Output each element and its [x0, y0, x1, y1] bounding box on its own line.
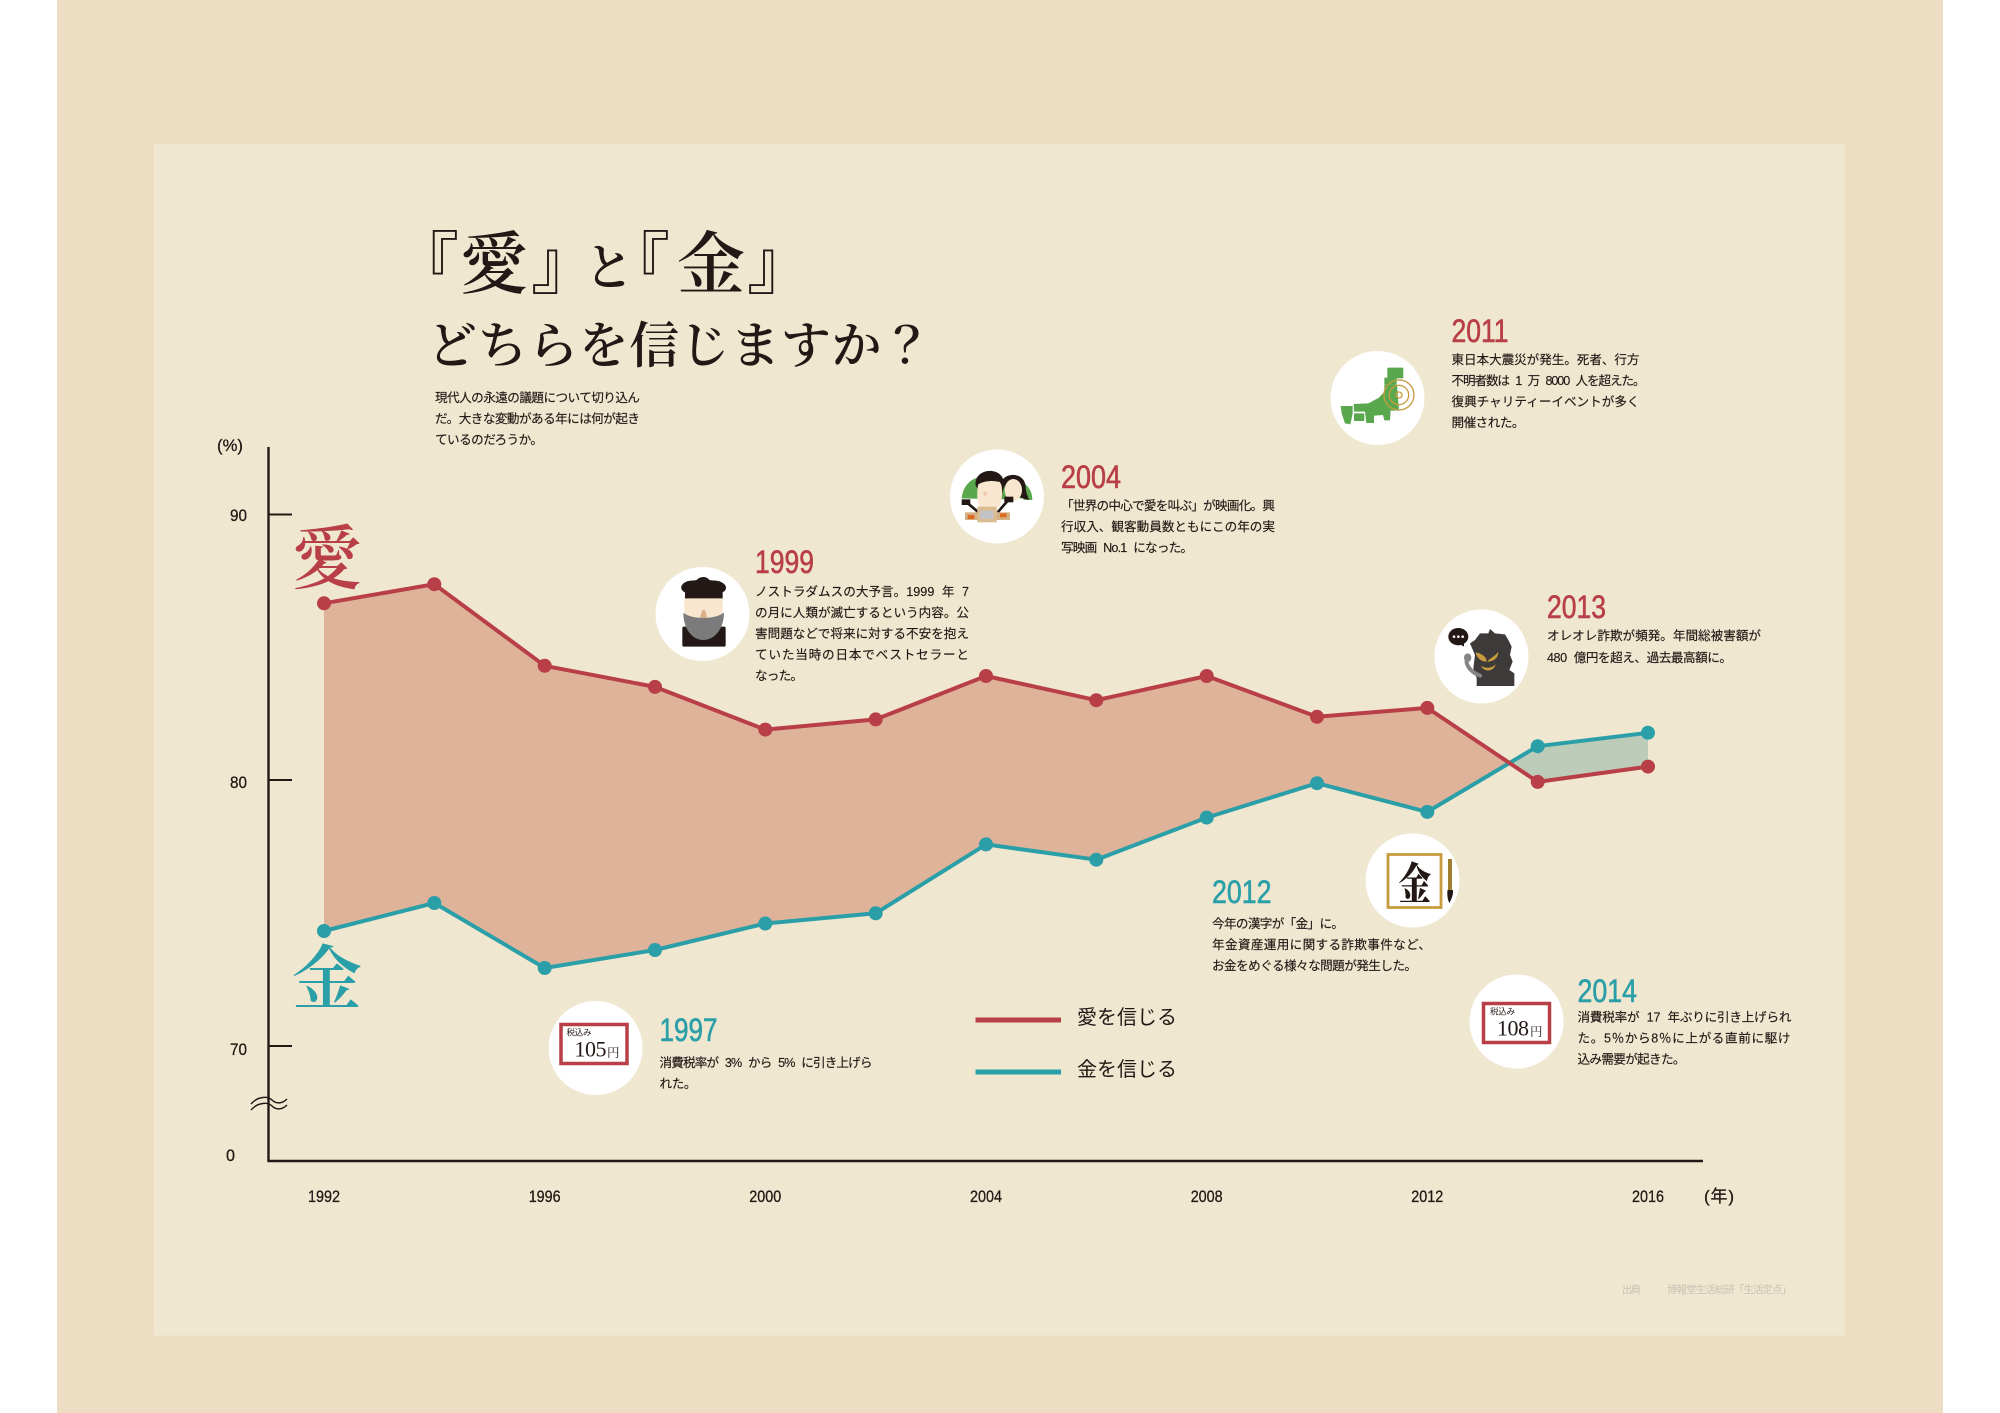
icon: Japan map earthquake — [1330, 351, 1424, 445]
x axis labels: (年) — [1704, 1187, 1734, 1206]
icon: price tag 108 — [1470, 974, 1564, 1068]
x axis labels: 1992 — [308, 1187, 340, 1206]
inner panel — [154, 144, 1845, 1336]
icon: kanji scroll and brush — [1366, 834, 1460, 928]
callout 2013: オレオレ詐欺が頻発。年間総被害額が — [1547, 628, 1761, 643]
icon: movie couple — [950, 450, 1044, 544]
area between lines — [324, 584, 1648, 968]
callout 2004: 行収入、観客動員数ともにこの年の実 — [1061, 519, 1275, 534]
callout 1999: 1999 — [755, 544, 814, 580]
series label: love: 愛 — [292, 503, 362, 604]
title: 『 — [602, 211, 670, 308]
callout 1999 — [656, 544, 969, 683]
y axis labels: 0 — [226, 1146, 235, 1165]
intro text: ているのだろうか。 — [435, 433, 543, 447]
legend: 愛を信じる — [1077, 1006, 1177, 1029]
line chart — [217, 436, 1734, 1206]
x axis labels: 1996 — [529, 1187, 561, 1206]
icon: price tag 108: 108 — [1497, 1016, 1529, 1040]
title: 』 — [747, 211, 815, 308]
callout 1999: 害問題などで将来に対する不安を抱え — [755, 626, 969, 641]
icon: Nostradamus — [656, 567, 750, 661]
y axis labels: 80 — [230, 773, 247, 792]
title: 』 — [531, 211, 599, 308]
x axis labels — [308, 1187, 1734, 1206]
callout 2012 — [1212, 834, 1460, 973]
x axis labels: 2004 — [970, 1187, 1002, 1206]
title — [391, 211, 932, 378]
callout 2013: 480 億円を超え、過去最高額に。 — [1547, 650, 1732, 665]
callout 1999: ノストラダムスの大予言。1999 年 7 — [755, 585, 969, 599]
callout 2011: 復興チャリティーイベントが多く — [1452, 394, 1640, 409]
callout 2011: 開催された。 — [1452, 416, 1524, 430]
source note: 出典 — [1622, 1283, 1642, 1296]
icon: price tag 105 — [549, 1001, 643, 1095]
legend — [976, 1006, 1177, 1081]
source note: 博報堂生活総研「生活定点」 — [1667, 1283, 1792, 1296]
callout 2011: 不明者数は 1 万 8000 人を超えた。 — [1452, 374, 1646, 388]
line: money — [317, 726, 1655, 975]
callout 1999: なった。 — [755, 669, 803, 683]
callout 2004: 2004 — [1061, 459, 1121, 495]
icon: kanji scroll and brush: 金 — [1398, 849, 1431, 913]
icon: price tag 108: 税込み — [1490, 1006, 1515, 1016]
x axis labels: 2008 — [1191, 1187, 1223, 1206]
callout 2014: 消費税率が 17 年ぶりに引き上げられ — [1578, 1010, 1792, 1024]
title: 『 — [391, 211, 459, 308]
callout 2004: 「世界の中心で愛を叫ぶ」が映画化。興 — [1061, 499, 1275, 513]
x axis labels: 2012 — [1411, 1187, 1443, 1206]
callout 2014: た。5％から8％に上がる直前に駆け — [1578, 1030, 1790, 1046]
icon: price tag 105: 税込み — [566, 1028, 592, 1038]
title: 愛 — [460, 211, 528, 308]
callout 2012: 年金資産運用に関する詐欺事件など、 — [1212, 937, 1431, 952]
callout 2012: 今年の漢字が「金」に。 — [1212, 916, 1344, 931]
y axis labels: (%) — [217, 436, 243, 455]
callout 2004: 写映画 No.1 になった。 — [1061, 541, 1193, 555]
callout 2013 — [1434, 589, 1761, 704]
icon: price tag 105: 円 — [607, 1043, 620, 1061]
callout 1997: 1997 — [660, 1012, 718, 1048]
intro text: だ。大きな変動がある年には何が起き — [435, 411, 640, 426]
legend: 金を信じる — [1077, 1058, 1177, 1081]
callout 2004 — [950, 450, 1275, 555]
line: love — [317, 577, 1655, 789]
x axis labels: 2016 — [1632, 1187, 1664, 1206]
title: と — [584, 228, 634, 300]
icon: phone scammer — [1434, 610, 1528, 704]
y axis labels: 90 — [230, 506, 247, 525]
callout 2014: 込み需要が起きた。 — [1578, 1052, 1686, 1066]
source note — [1622, 1283, 1792, 1296]
y axis labels: 70 — [230, 1040, 247, 1059]
intro text: 現代人の永遠の議題について切り込ん — [435, 391, 640, 405]
callout 1997 — [549, 1001, 872, 1095]
callout 1997: 消費税率が 3% から 5% に引き上げら — [660, 1056, 872, 1070]
callout 2014 — [1470, 973, 1792, 1068]
y axis labels — [217, 436, 247, 1165]
series label: money: 金 — [292, 923, 362, 1024]
callout 2013: 2013 — [1547, 589, 1606, 625]
x axis — [268, 1160, 1703, 1162]
callout 2011: 2011 — [1452, 313, 1508, 349]
axis break — [251, 1097, 287, 1110]
callout 2011: 東日本大震災が発生。死者、行方 — [1452, 352, 1640, 367]
callout 2012: 2012 — [1212, 874, 1272, 910]
callout 2012: お金をめぐる様々な問題が発生した。 — [1212, 959, 1417, 973]
y axis — [268, 447, 292, 1162]
title: どちらを信じますか？ — [427, 306, 932, 378]
icon: price tag 108: 円 — [1530, 1022, 1543, 1040]
callout 2014: 2014 — [1578, 973, 1637, 1009]
icon: price tag 105: 105 — [574, 1036, 606, 1062]
title: 金 — [677, 211, 745, 308]
intro text — [435, 391, 640, 447]
callout 2011 — [1330, 313, 1646, 445]
x axis labels: 2000 — [749, 1187, 781, 1206]
callout 1999: ていた当時の日本でベストセラーと — [755, 648, 969, 662]
callout 1997: れた。 — [660, 1077, 696, 1091]
callout 1999: の月に人類が滅亡するという内容。公 — [755, 606, 969, 620]
